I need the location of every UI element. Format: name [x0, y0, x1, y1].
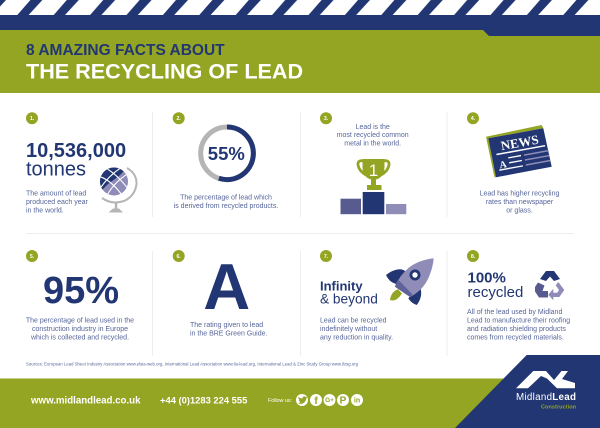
- icon: rocket: [386, 258, 434, 305]
- donut chart: 55%: 55%: [208, 143, 245, 164]
- text: fact 7 description: indefinitely without: [320, 326, 377, 333]
- header stripes: [0, 0, 600, 15]
- badge 6: 6.: [177, 254, 181, 260]
- panel: fact 7: [320, 250, 434, 342]
- figure: tonnes: [26, 140, 126, 181]
- header band: [0, 15, 600, 93]
- panel: fact 3: [320, 112, 409, 214]
- text: fact 3 description: metal in the world.: [344, 140, 401, 148]
- footer contact: Follow us:: [268, 398, 292, 404]
- badge 1: 1.: [30, 116, 35, 122]
- footer contact: [30, 394, 292, 406]
- text: fact 3 description: Lead is the: [356, 124, 390, 131]
- footer contact: +44 (0)1283 224 555: [160, 394, 247, 406]
- text: fact 6 description: The rating given to lead: [190, 322, 263, 329]
- icon: newspaper: NEWS: [499, 132, 540, 153]
- text: sources: Sources: European Lead Sheet Industry Association www.elsia-web.org, International Lead Association www.ila-lead.org, International Lead & Zinc Study Group www.ilzsg.org: [26, 362, 359, 366]
- panel: fact 6: [173, 250, 267, 338]
- text: fact 4 description: or glass.: [506, 208, 533, 214]
- title: THE RECYCLING OF LEAD: [26, 59, 303, 84]
- badge 3: 3.: [324, 116, 329, 122]
- text: fact 5 description: The percentage of lead used in the: [26, 318, 134, 325]
- logo wordmark: [516, 392, 577, 410]
- text: fact 7 description: any reduction in quality.: [320, 334, 393, 342]
- text: fact 4 description: Lead has higher recycling: [480, 191, 559, 198]
- icon: globe: [98, 165, 137, 212]
- icon: newspaper: A: [499, 159, 508, 171]
- panel: fact 1: [26, 112, 137, 214]
- text: fact 8 description: and radiation shielding products: [467, 326, 566, 333]
- text: fact 1 description: The amount of lead: [26, 191, 86, 198]
- figure: tonnes: 10,536,000: [26, 140, 126, 162]
- footer contact: www.midlandlead.co.uk: [30, 396, 141, 406]
- text: fact 2 description: The percentage of lead which: [180, 194, 272, 202]
- text: fact 3 description: most recycled common: [337, 132, 409, 139]
- figure: A rating: A: [203, 250, 250, 323]
- panel: fact 5: [26, 250, 134, 342]
- logo panel: [455, 355, 600, 428]
- panel: fact 8: [467, 250, 570, 342]
- title: 8 AMAZING FACTS ABOUT: [26, 42, 225, 59]
- text: fact 7 description: Lead can be recycled: [320, 318, 387, 325]
- social icons: f: [314, 396, 318, 407]
- icon: recycle: [535, 271, 564, 300]
- text: fact 5 description: construction industry in Europe: [32, 326, 128, 333]
- social icons: P: [340, 396, 347, 406]
- text: fact 8 description: comes from recycled materials.: [467, 334, 564, 342]
- badge 8: 8.: [471, 254, 476, 260]
- heading: infinity and beyond: Infinity: [320, 279, 363, 294]
- chart: podium: [340, 192, 406, 214]
- heading: infinity and beyond: & beyond: [320, 292, 378, 306]
- logo wordmark: Construction: [541, 404, 577, 410]
- text: fact 1 description: in the world.: [26, 208, 64, 214]
- logo wordmark: MidlandLead: [516, 392, 576, 403]
- social icons: G+: [325, 397, 334, 404]
- badge 4: 4.: [471, 116, 476, 122]
- text: fact 2 description: is derived from recycled products.: [174, 203, 278, 210]
- figure: 95%: 95%: [43, 270, 119, 312]
- panel: fact 4: [467, 112, 559, 214]
- heading: 100% recycled: recycled: [468, 284, 523, 301]
- text: fact 4 description: rates than newspaper: [486, 199, 554, 206]
- badge 5: 5.: [30, 254, 35, 260]
- text: fact 8 description: All of the lead used by Midland: [467, 309, 562, 316]
- panel: fact 2: [173, 112, 278, 210]
- heading: 100% recycled: [468, 270, 523, 301]
- badge 2: 2.: [177, 116, 181, 122]
- logo mark: [516, 371, 575, 388]
- text: fact 5 description: which is collected and recycled.: [30, 334, 129, 342]
- icon: newspaper: [486, 125, 552, 177]
- figure: tonnes: tonnes: [26, 159, 86, 181]
- text: fact 8 description: Lead to manufacture their roofing: [467, 318, 570, 325]
- text: fact 6 description: in the BRE Green Guide.: [190, 330, 267, 338]
- footer band: [0, 378, 600, 428]
- social icons: [296, 394, 363, 407]
- badge 7: 7.: [324, 254, 329, 260]
- social icons: in: [354, 398, 360, 404]
- heading: 100% recycled: 100%: [468, 270, 506, 287]
- heading: infinity and beyond: [320, 279, 378, 306]
- icon: trophy: 1: [369, 161, 378, 180]
- text: fact 1 description: produced each year: [26, 199, 89, 206]
- title: [26, 42, 303, 84]
